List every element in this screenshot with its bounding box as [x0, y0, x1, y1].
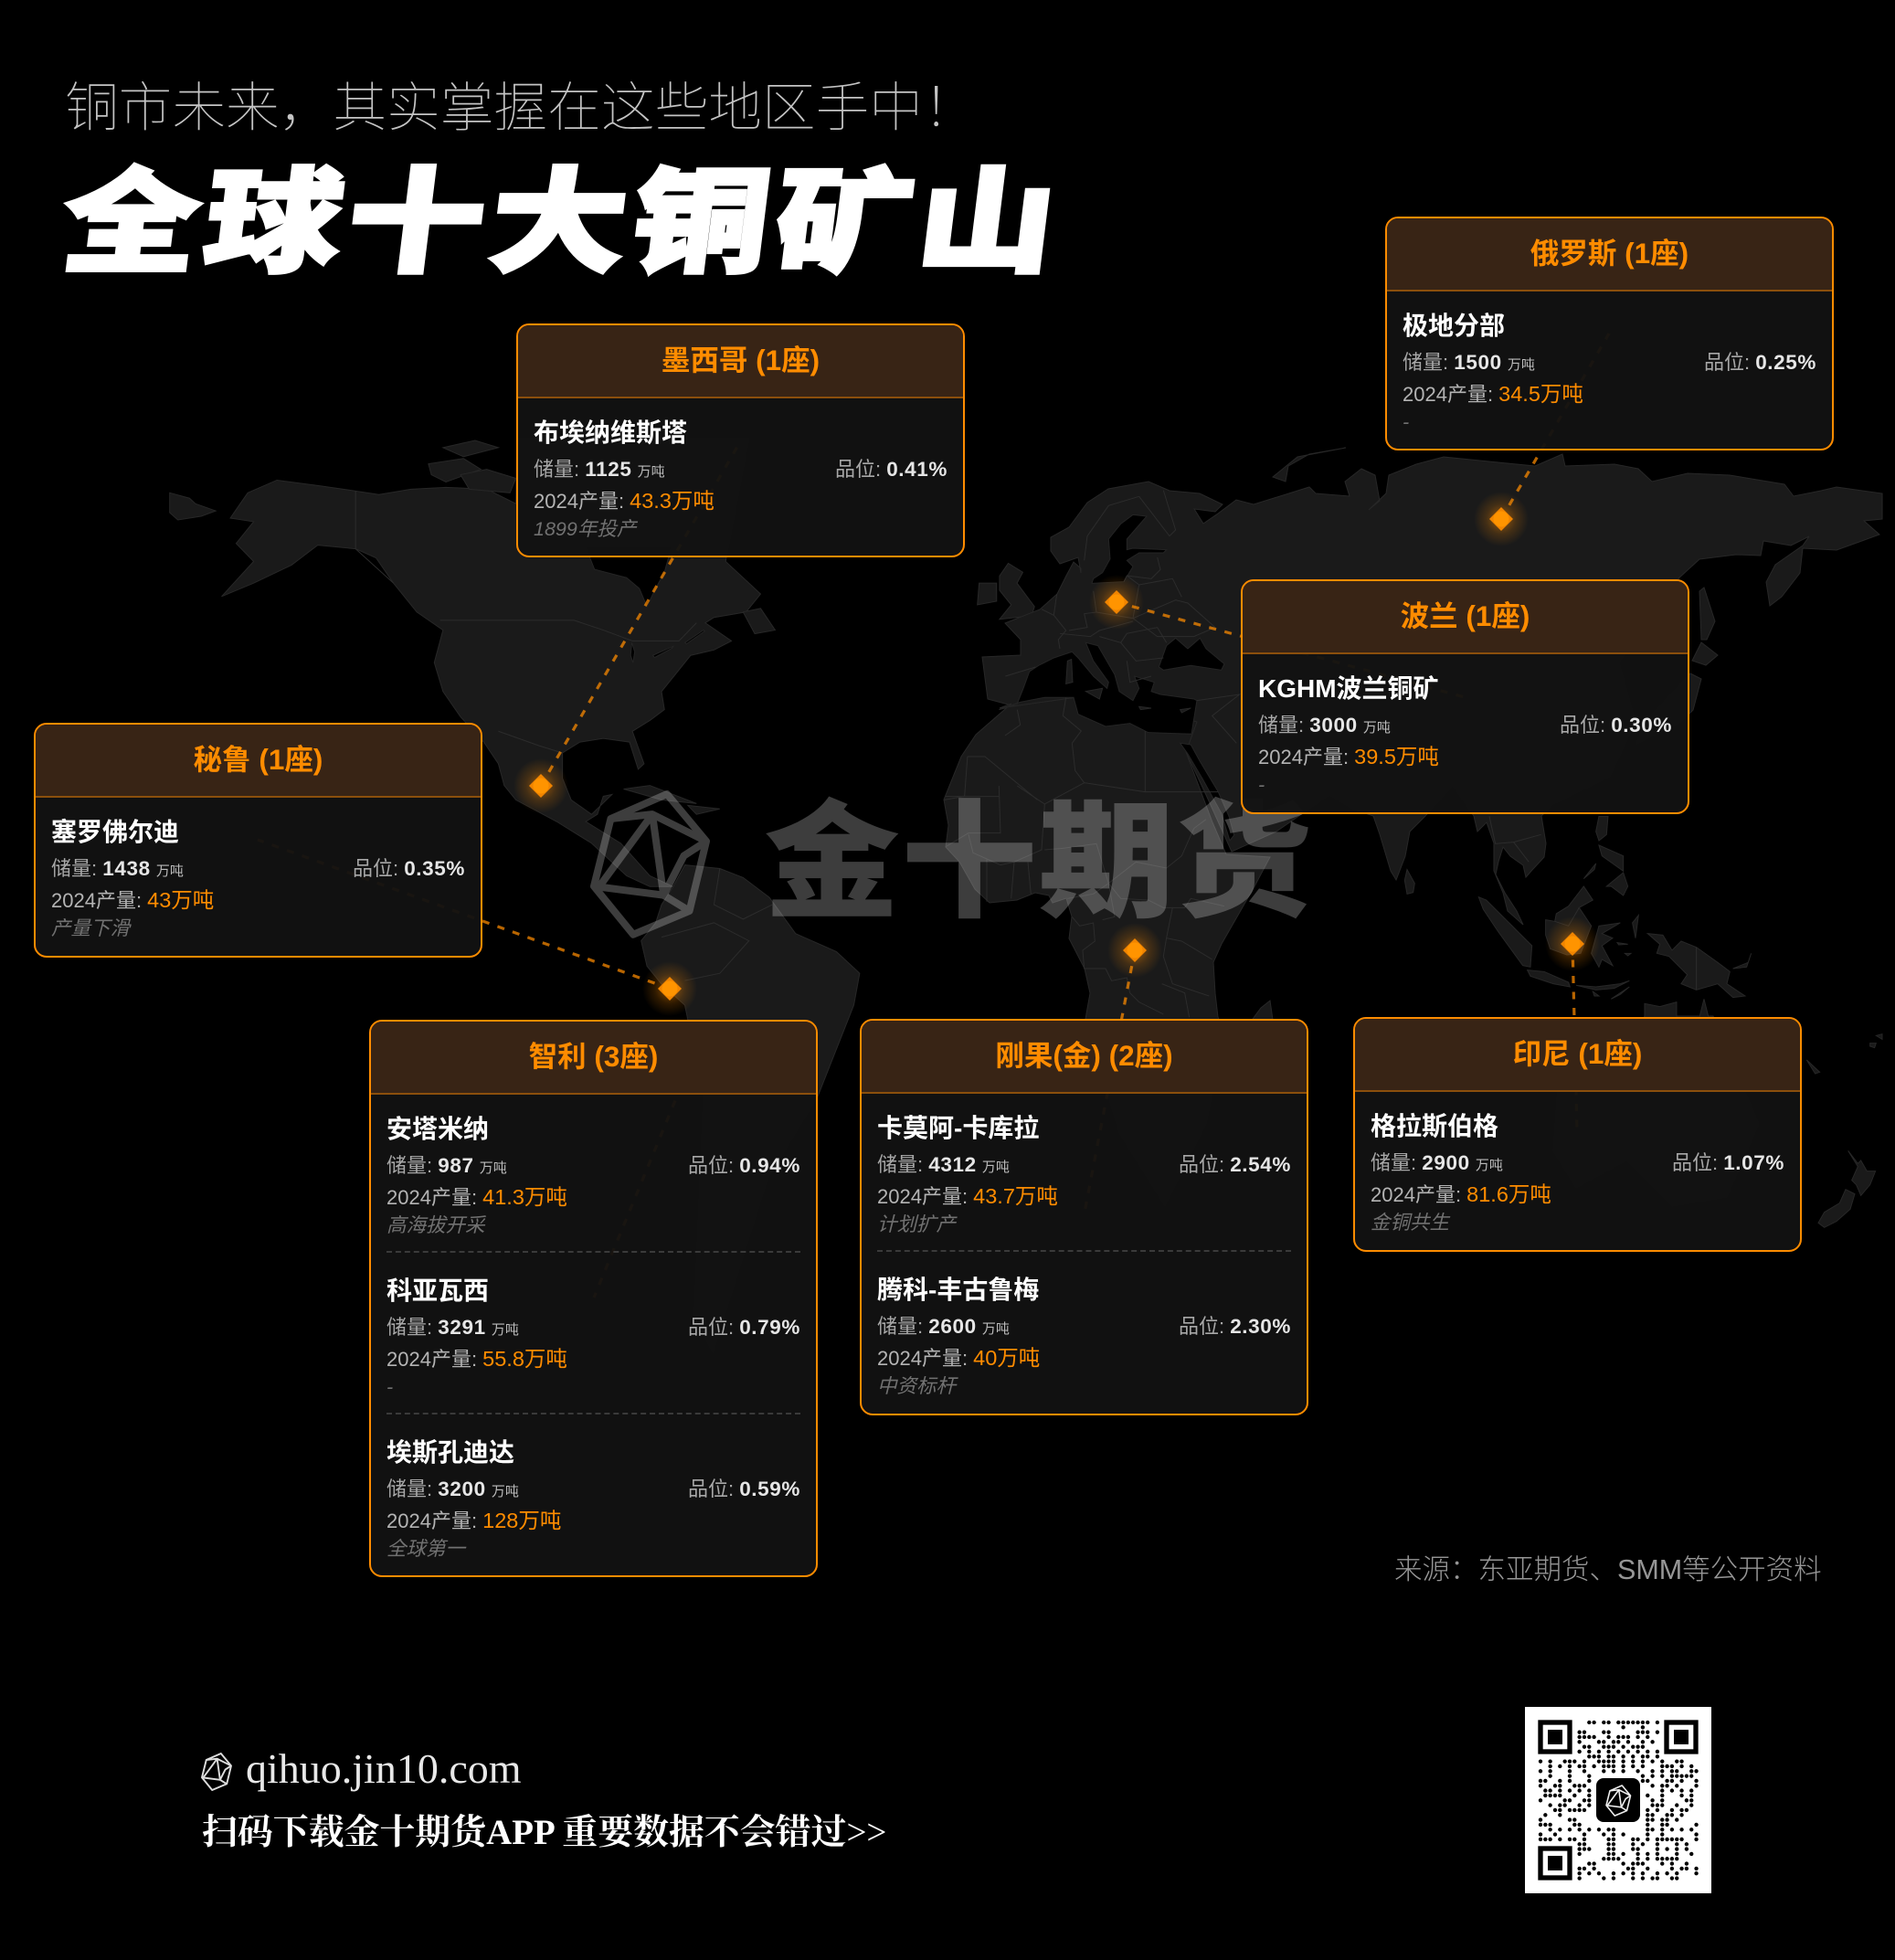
mine: polar division [1403, 311, 1816, 433]
mine: grasberg: 2024产量: 81.6万吨 [1371, 1182, 1551, 1206]
mine: polar division: 极地分部 [1403, 311, 1505, 340]
card header: 俄罗斯 (1座) [1530, 237, 1689, 270]
mine: tenke fungurume [877, 1276, 1291, 1397]
qr center logo [1596, 1778, 1640, 1822]
mine: buenavista: 1899年投产 [534, 518, 636, 540]
icon: jin10 logo [202, 1753, 231, 1790]
website url: qihuo.jin10.com [246, 1745, 522, 1792]
qr finder centers [1548, 1730, 1689, 1870]
mine: kghm: KGHM波兰铜矿 [1258, 674, 1439, 702]
marker: indonesia [1545, 916, 1600, 971]
mine: collahuasi: - [386, 1376, 393, 1398]
card header: 刚果(金) (2座) [995, 1039, 1173, 1072]
card header: 波兰 (1座) [1401, 599, 1530, 632]
mine: kamoa-kakula: 品位: 2.54% [1179, 1153, 1291, 1176]
mine: collahuasi: 储量: 3291 万吨 [386, 1316, 519, 1339]
mine: cerro verde: 储量: 1438 万吨 [51, 857, 184, 880]
card header: 智利 (3座) [529, 1040, 658, 1073]
card header [1387, 218, 1832, 291]
mine: tenke fungurume: 储量: 2600 万吨 [877, 1315, 1010, 1338]
card: russia [1385, 217, 1834, 450]
mine: polar division: - [1403, 411, 1409, 433]
mine: polar division: 储量: 1500 万吨 [1403, 351, 1535, 374]
mine: buenavista: 2024产量: 43.3万吨 [534, 489, 715, 513]
mine: escondida: 埃斯孔迪达 [386, 1438, 514, 1466]
mine: kghm: 储量: 3000 万吨 [1258, 714, 1391, 736]
mine: kghm [1258, 674, 1672, 796]
mine: kamoa-kakula: 卡莫阿-卡库拉 [877, 1113, 1039, 1142]
mine: collahuasi [386, 1276, 800, 1414]
card header [862, 1021, 1307, 1094]
mine: cerro verde: 品位: 0.35% [353, 857, 465, 880]
source note: 来源：东亚期货、SMM等公开资料 [1394, 1554, 1822, 1585]
mine: buenavista: 储量: 1125 万吨 [534, 458, 665, 481]
mine: grasberg: 金铜共生 [1371, 1212, 1449, 1234]
mine: kamoa-kakula: 储量: 4312 万吨 [877, 1153, 1010, 1176]
mine: antamina: 储量: 987 万吨 [386, 1154, 507, 1177]
card: congo [860, 1019, 1308, 1415]
card header [371, 1022, 816, 1095]
card: chile [369, 1020, 818, 1577]
qr finder patterns [1540, 1722, 1696, 1878]
mine: tenke fungurume: 2024产量: 40万吨 [877, 1346, 1040, 1370]
mine: polar division: 品位: 0.25% [1704, 351, 1816, 374]
marker: peru [642, 961, 697, 1016]
mine: collahuasi: 科亚瓦西 [386, 1276, 489, 1305]
country borders: africa [946, 786, 1224, 1017]
dashed connectors [258, 334, 1609, 1298]
mine: kghm: - [1258, 774, 1265, 796]
mine: kamoa-kakula: 2024产量: 43.7万吨 [877, 1184, 1058, 1208]
mine: polar division: 2024产量: 34.5万吨 [1403, 382, 1583, 406]
land: eurasia and africa [944, 448, 1882, 1206]
card header: 秘鲁 (1座) [194, 743, 323, 776]
mine: grasberg: 品位: 1.07% [1672, 1151, 1784, 1174]
mine: cerro verde [51, 817, 465, 939]
card header [518, 325, 963, 398]
mine: antamina [386, 1115, 800, 1253]
card: indonesia [1353, 1017, 1802, 1252]
land: mediterranean islands [1066, 660, 1191, 713]
mine: antamina: 2024产量: 41.3万吨 [386, 1185, 567, 1209]
mine: buenavista: 布埃纳维斯塔 [534, 418, 687, 446]
mine: antamina: 安塔米纳 [386, 1115, 489, 1142]
mine: cerro verde: 产量下滑 [51, 917, 130, 939]
call to action: 扫码下载金十期货APP 重要数据不会错过>> [202, 1813, 886, 1852]
marker: poland [1089, 575, 1144, 630]
subtitle: 铜市未来，其实掌握在这些地区手中！ [65, 64, 977, 142]
land: americas [170, 439, 1034, 1352]
mine: escondida: 储量: 3200 万吨 [386, 1478, 519, 1500]
mine: kghm: 2024产量: 39.5万吨 [1258, 745, 1439, 768]
mine: collahuasi: 品位: 0.79% [688, 1316, 800, 1339]
card: mexico [516, 323, 965, 557]
mine: tenke fungurume: 品位: 2.30% [1179, 1315, 1291, 1338]
mine: kamoa-kakula: 计划扩产 [877, 1213, 956, 1235]
mine: buenavista: 品位: 0.41% [835, 458, 948, 481]
land: new zealand and pacific islands [1806, 1034, 1882, 1227]
card: poland [1241, 579, 1689, 814]
watermark text: 金十期货 [764, 760, 1313, 944]
card: peru [34, 723, 482, 958]
mine: grasberg [1371, 1111, 1784, 1234]
qr code [1525, 1707, 1711, 1893]
mine: tenke fungurume: 腾科-丰古鲁梅 [877, 1276, 1039, 1303]
mine: buenavista [534, 418, 948, 540]
marker: chile [666, 1029, 721, 1084]
mine: antamina: 高海拔开采 [386, 1214, 485, 1236]
country borders: europe and middle east [1005, 491, 1240, 804]
main title: 全球十大铜矿山 [55, 131, 1073, 295]
watermark logo [594, 794, 706, 935]
land: southeast asia islands [1404, 816, 1752, 1017]
seas: mediterranean, black sea, baltic [999, 514, 1234, 841]
card header [1243, 581, 1688, 654]
mine: escondida [386, 1438, 800, 1560]
mine: antamina: 品位: 0.94% [688, 1154, 800, 1177]
mine: escondida: 2024产量: 128万吨 [386, 1509, 561, 1532]
mine: escondida: 全球第一 [386, 1538, 465, 1560]
country borders: americas [355, 491, 1037, 980]
country borders: southeast asia [1489, 816, 1697, 990]
qr data dots [1540, 1722, 1697, 1879]
seas: hudson bay and great lakes [586, 547, 704, 662]
marker: mexico [513, 758, 568, 813]
mine: tenke fungurume: 中资标杆 [877, 1375, 956, 1397]
mine: cerro verde: 塞罗佛尔迪 [51, 817, 179, 846]
mine: kghm: 品位: 0.30% [1560, 714, 1672, 736]
mine: grasberg: 储量: 2900 万吨 [1371, 1151, 1503, 1174]
mine: grasberg: 格拉斯伯格 [1371, 1111, 1498, 1140]
card header: 印尼 (1座) [1513, 1037, 1642, 1070]
card header [36, 725, 481, 798]
marker: russia [1474, 492, 1529, 546]
card header: 墨西哥 (1座) [662, 344, 820, 376]
card header [1355, 1019, 1800, 1092]
mine: cerro verde: 2024产量: 43万吨 [51, 888, 214, 912]
mine: collahuasi: 2024产量: 55.8万吨 [386, 1347, 567, 1371]
marker: congo [1107, 923, 1162, 978]
mine: kamoa-kakula [877, 1113, 1291, 1252]
mine: escondida: 品位: 0.59% [688, 1478, 800, 1500]
